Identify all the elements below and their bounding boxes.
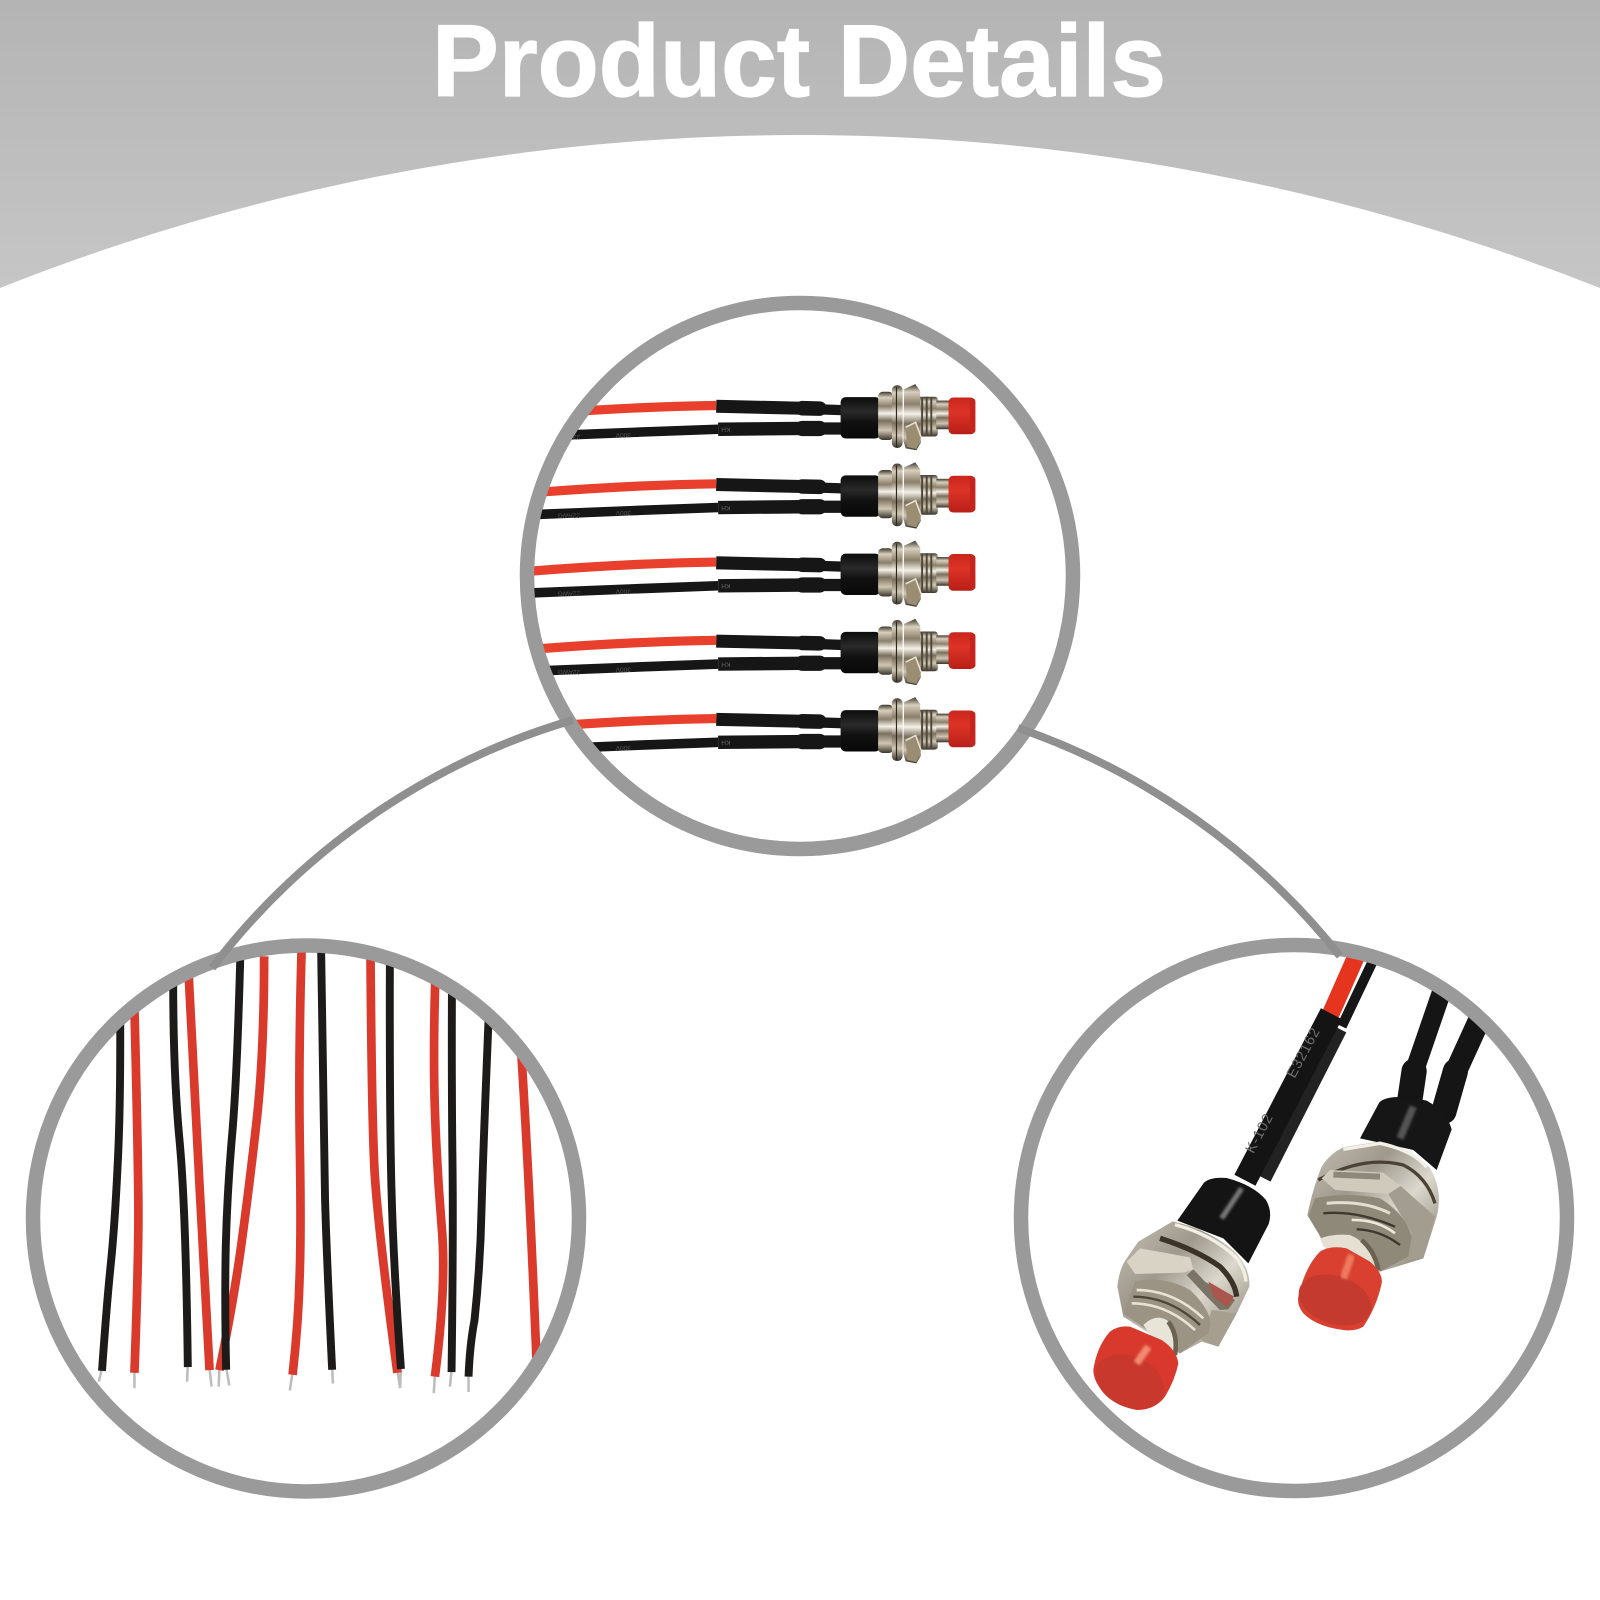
switch 5 (519, 697, 975, 763)
ring: right circle (1021, 945, 1567, 1491)
switch 3 (519, 541, 975, 607)
ring: left circle (33, 946, 579, 1492)
switch 4 (519, 619, 975, 685)
title: Product Details (432, 4, 1166, 118)
switch 1 (519, 384, 975, 450)
black wires (102, 947, 489, 1377)
switch leads (1243, 955, 1483, 1180)
panel: bottom-right circle with close-up of switches (1021, 945, 1567, 1491)
stripped wire tips (99, 1364, 469, 1393)
red wires (134, 947, 537, 1377)
wire marking: E32162: E32162 (1284, 1025, 1324, 1081)
switch 2 (519, 462, 975, 529)
rear switch wires (1409, 985, 1483, 1111)
panel: top circle with five push-button switches (519, 303, 1073, 849)
wire bundle (99, 947, 537, 1393)
rear switch (1292, 1097, 1452, 1334)
front switch wires (1245, 955, 1372, 1180)
close-up switches (1087, 955, 1483, 1420)
connector arc: right (1018, 728, 1340, 956)
wire marking: K-102: K-102 (1243, 1111, 1277, 1156)
front switch (1087, 1178, 1270, 1420)
switches row group (519, 384, 975, 763)
connector arc: left (212, 720, 573, 968)
header band (0, 0, 1600, 288)
ring: top circle (527, 303, 1073, 849)
panel: bottom-left circle with loose wires (33, 946, 579, 1492)
